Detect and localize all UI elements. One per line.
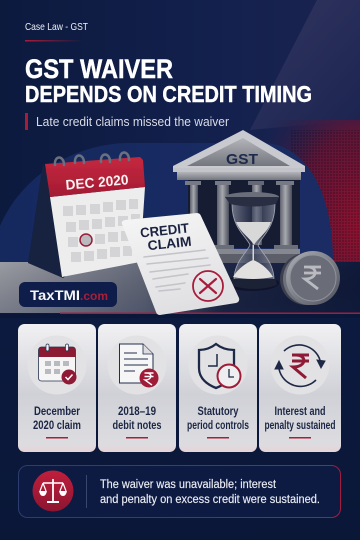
- icon: scales of justice: [32, 470, 74, 512]
- building label: GST: [226, 151, 258, 168]
- coin symbol: [304, 267, 321, 289]
- card label: period controls: [187, 418, 249, 432]
- calendar month: DEC 2020: [65, 171, 129, 193]
- icon: calendar with check: [38, 344, 76, 384]
- calendar marked date: [80, 234, 92, 246]
- card label: debit notes: [112, 418, 162, 432]
- card label: 2020 claim: [33, 418, 81, 432]
- logo: TaxTMI.com: TaxTMI: [30, 287, 80, 303]
- document heading: CREDIT: [139, 220, 190, 241]
- conclusion text: and penalty on excess credit were sustained.: [100, 494, 320, 506]
- document heading: [139, 220, 192, 253]
- conclusion text: [100, 479, 320, 506]
- card label: [33, 404, 81, 432]
- panel: December 2020 claim: [18, 324, 96, 452]
- illustration: GST building: [173, 130, 305, 263]
- icon: document with rupee: [120, 344, 158, 388]
- card label: [112, 404, 162, 432]
- icon: rupee with cycle arrows: [275, 345, 325, 386]
- illustration: credit claim document: [122, 213, 239, 315]
- title: GST WAIVER: [25, 54, 173, 84]
- panel: Interest and penalty sustained: [259, 324, 341, 452]
- panel: 2018-19 debit notes: [98, 324, 176, 452]
- card label: 2018–19: [118, 404, 156, 418]
- eyebrow label: Case Law - GST: [25, 21, 88, 33]
- rejected mark: [193, 271, 223, 301]
- logo: TaxTMI.com: [19, 282, 117, 307]
- illustration: rupee coins: [280, 251, 340, 305]
- card label: [187, 404, 249, 432]
- panel: conclusion banner: [18, 466, 340, 518]
- card label: [264, 404, 336, 432]
- document heading: CLAIM: [147, 234, 192, 253]
- title: [25, 54, 312, 107]
- subtitle: Late credit claims missed the waiver: [36, 115, 229, 129]
- eyebrow rule: [25, 40, 83, 42]
- panel: Statutory period controls: [179, 324, 257, 452]
- title: DEPENDS ON CREDIT TIMING: [25, 81, 312, 107]
- illustration: calendar: [28, 152, 145, 278]
- logo: TaxTMI.com: .com: [80, 291, 108, 303]
- icon: shield with clock: [199, 344, 240, 388]
- card label: Interest and: [274, 404, 326, 418]
- conclusion text: The waiver was unavailable; interest: [100, 479, 277, 491]
- card label: December: [34, 404, 80, 418]
- illustration: hourglass: [225, 192, 279, 291]
- card label: Statutory: [198, 404, 239, 418]
